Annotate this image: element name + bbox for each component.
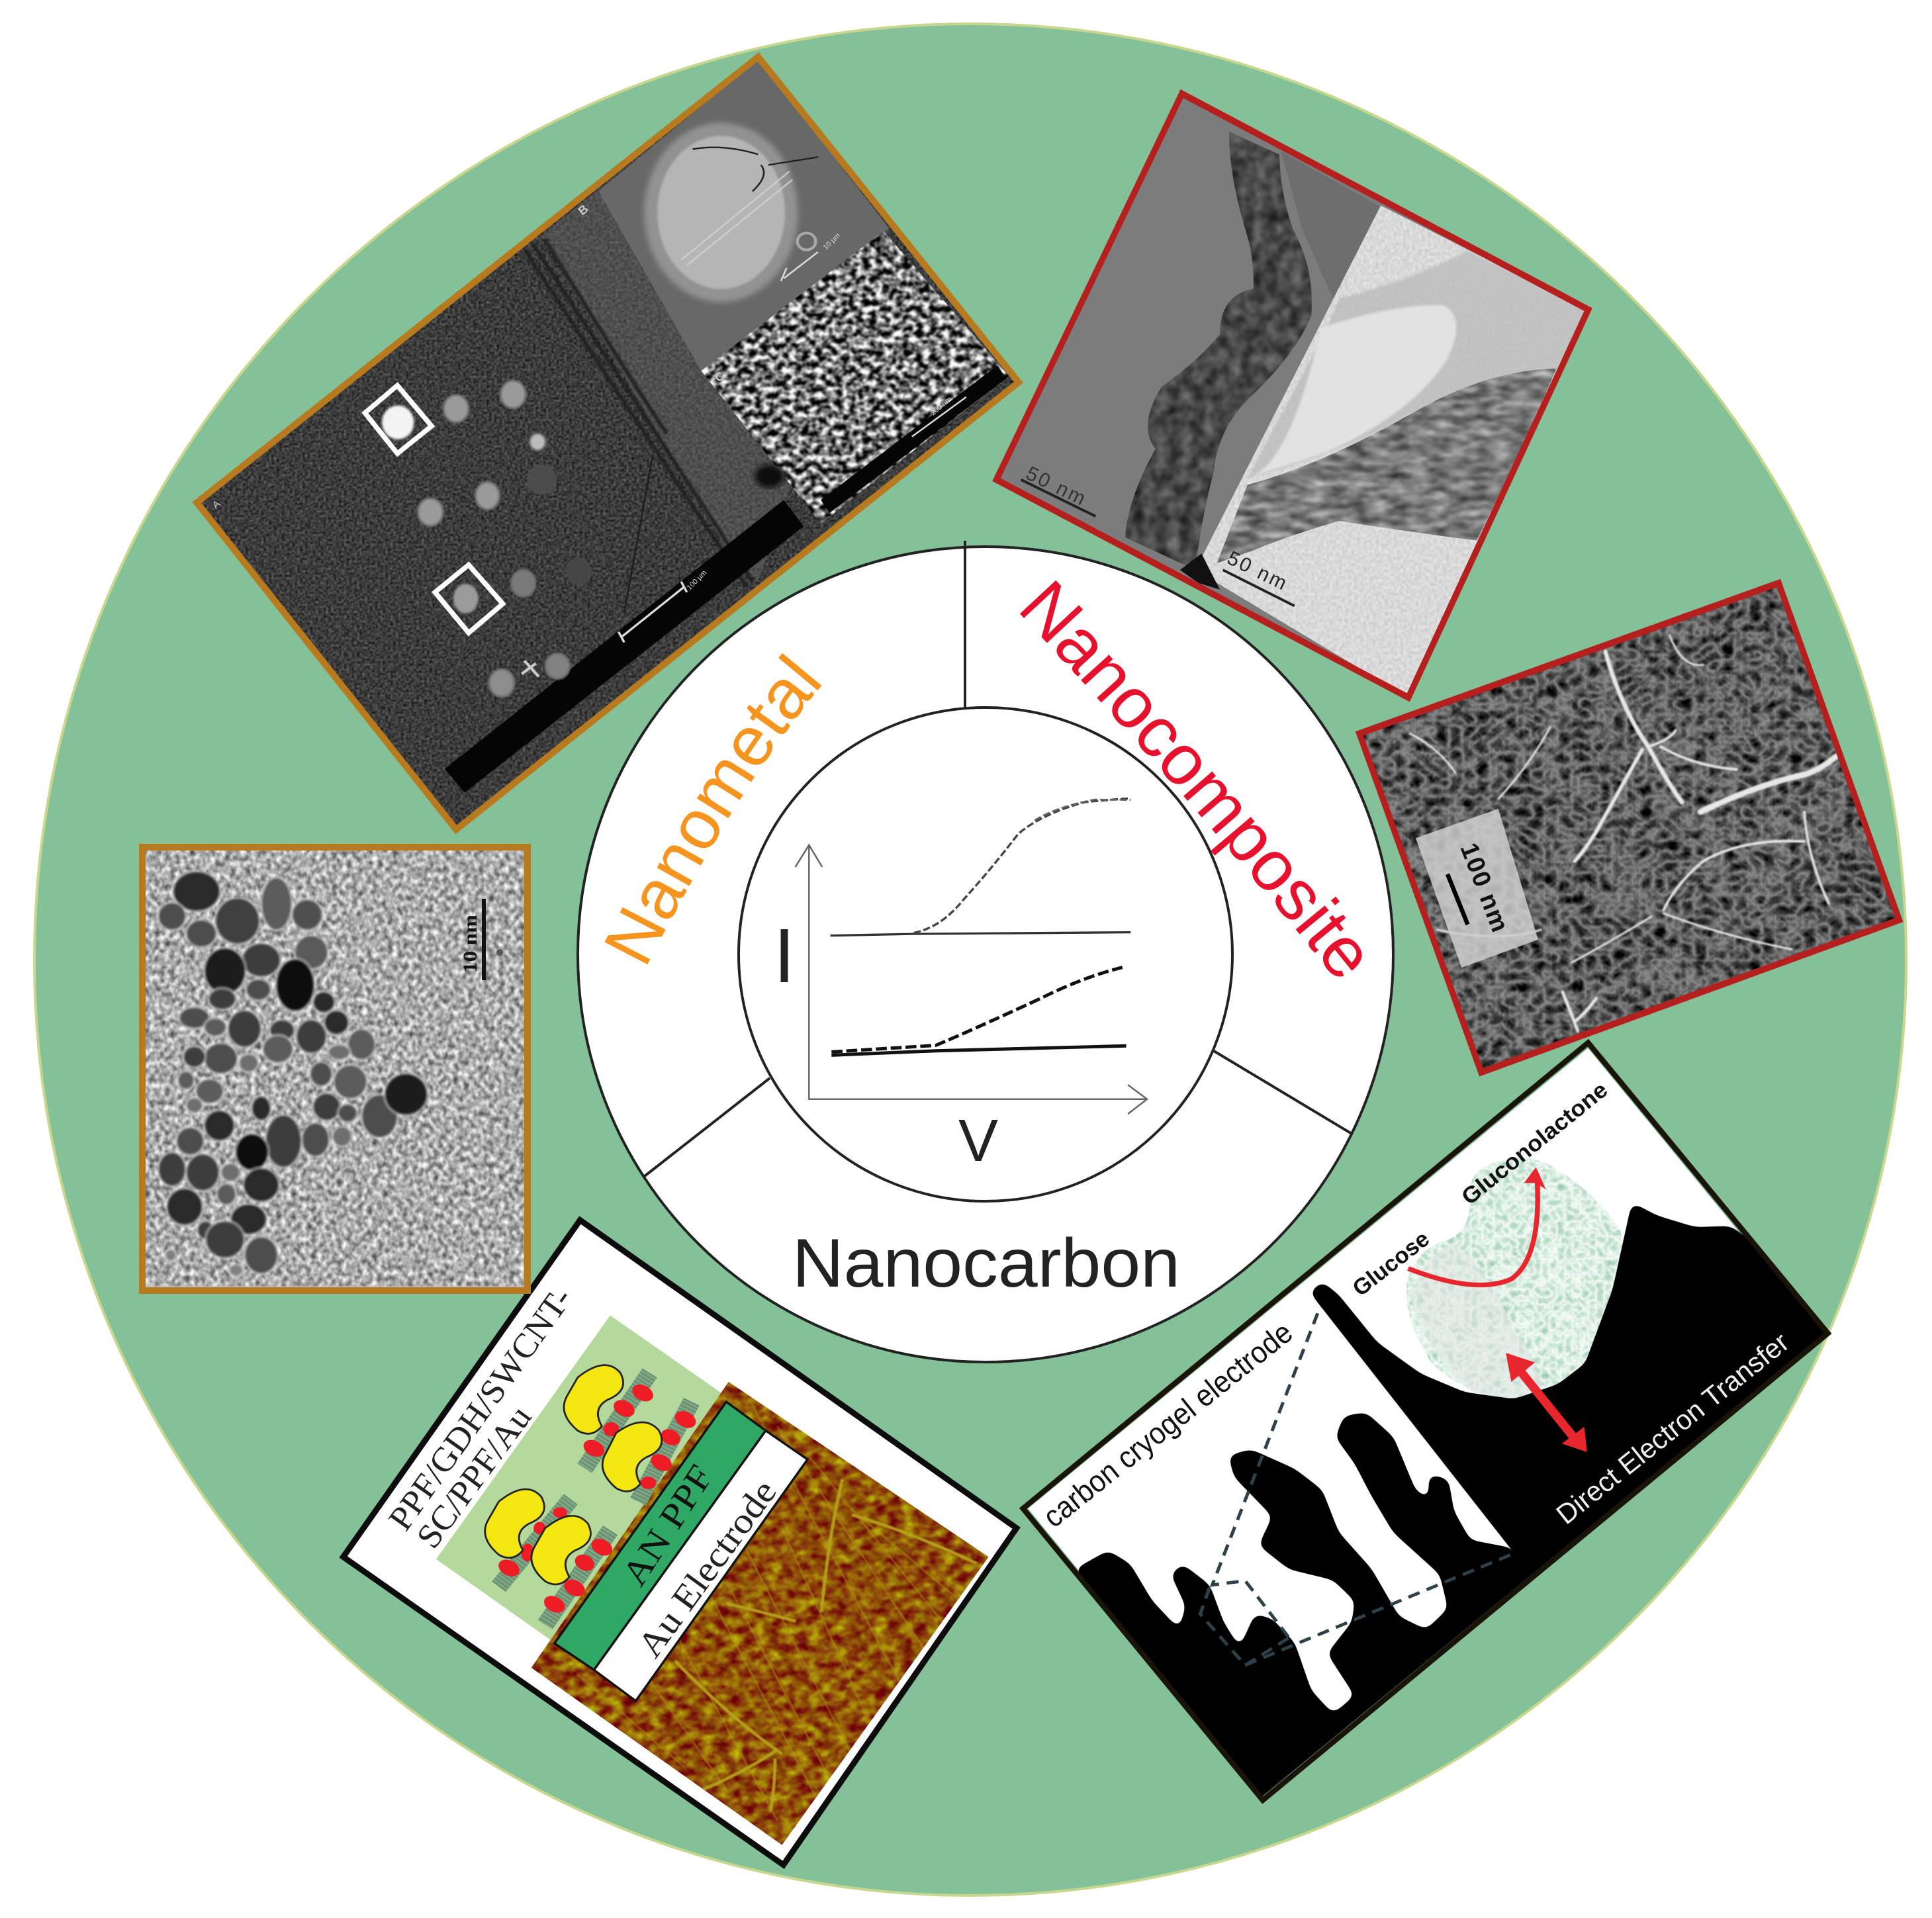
B micrograph region <box>541 60 889 582</box>
inner circle <box>739 708 1232 1201</box>
label: direct electron transfer: Direct Electron Transfer <box>1550 1326 1795 1530</box>
central wheel <box>576 541 1395 1363</box>
panel: nanometal SEM micrograph: 100 µm <box>686 569 708 592</box>
spots <box>418 381 590 697</box>
light green layer <box>436 1315 731 1641</box>
black caption bar <box>445 500 804 793</box>
C micrograph region <box>701 231 1009 524</box>
highlighted boxes <box>382 406 414 439</box>
panel: nanometal SEM micrograph: C <box>712 369 727 385</box>
left electrode mass <box>1075 1412 1541 1817</box>
electron transfer arrow <box>1518 1369 1575 1438</box>
panel: nanometal SEM micrograph: B <box>576 202 591 218</box>
panel: nanometal TEM nanoparticles <box>142 847 528 1291</box>
carbon nanotubes <box>499 1373 692 1625</box>
label: PPF/GDH/SWCNT-: PPF/GDH/SWCNT- <box>381 1281 580 1537</box>
label: gluconolactone: Gluconolactone <box>1457 1077 1612 1210</box>
scale bar <box>482 899 486 980</box>
axis label: I: I <box>774 913 795 999</box>
label: Au Electrode: Au Electrode <box>629 1473 784 1665</box>
axis label: V: V <box>958 1108 998 1174</box>
enzyme <box>1406 1158 1622 1399</box>
scale label: 50 nm <box>1023 463 1091 510</box>
voltammogram chart <box>796 798 1147 1114</box>
scale label: 10 nm <box>459 915 481 973</box>
scratches <box>524 239 753 587</box>
heading: Nanocomposite: Nanocomposite <box>1019 580 1362 977</box>
large particle <box>644 122 798 302</box>
panel: nanocarbon cryogel electrode schematic <box>1023 1043 1882 1817</box>
label: carbon cryogel electrode: carbon cryogel electrode <box>1036 1314 1299 1534</box>
panel: nanocomposite TEM micrographs <box>996 94 1590 698</box>
heading: Nanometal: Nanometal <box>605 653 822 965</box>
scale label: 50 nm <box>1224 547 1292 595</box>
dashed zoom lines <box>1200 1313 1514 1665</box>
red mediator blobs <box>495 1381 699 1616</box>
panel: nanometal SEM micrograph: 10 µm <box>822 232 842 251</box>
AFM texture <box>527 1377 991 1847</box>
outer ring <box>578 547 1393 1362</box>
label: glucose: Glucose <box>1348 1226 1434 1301</box>
yellow enzymes <box>485 1365 662 1584</box>
right electrode mass <box>1310 1203 1882 1633</box>
panel: nanometal SEM micrograph: 200 nm <box>929 396 953 417</box>
Au electrode bar <box>594 1431 807 1701</box>
scale patch <box>1416 809 1538 968</box>
panel: nanometal SEM micrograph: A <box>210 498 222 511</box>
scale label: 100 nm <box>1455 839 1514 936</box>
red reaction arrow <box>1408 1179 1538 1285</box>
sector dividers <box>645 541 1353 1176</box>
label: SC/PPF/Au: SC/PPF/Au <box>410 1399 539 1555</box>
panel: nanometal SEM micrograph <box>197 57 1019 829</box>
AN PPF bar <box>555 1402 766 1670</box>
heading: Nanocarbon: Nanocarbon <box>792 1225 1180 1302</box>
label: AN PPF: AN PPF <box>614 1458 721 1593</box>
panel: nanocomposite SEM micrograph <box>1359 583 1899 1072</box>
panel: nanocarbon enzyme electrode with AFM image <box>344 1220 1017 1865</box>
